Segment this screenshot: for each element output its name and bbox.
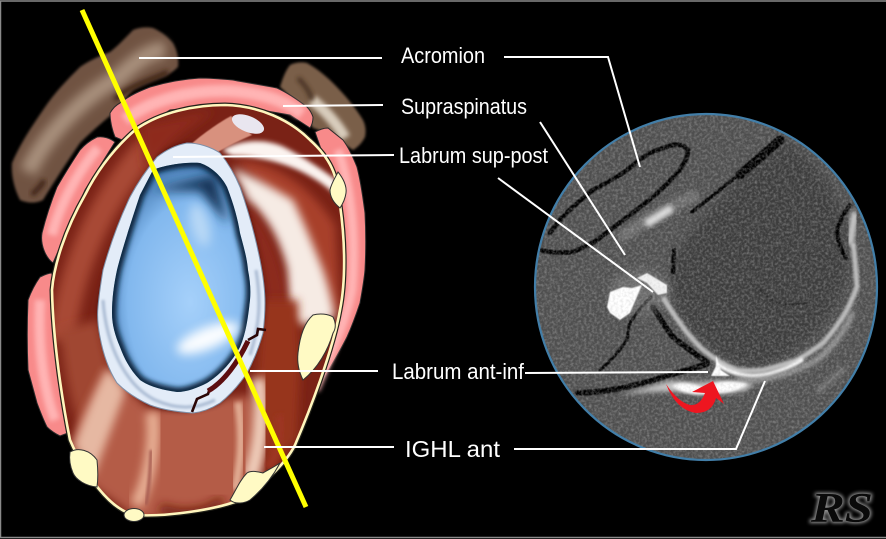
- acromion bone: [12, 27, 366, 203]
- labral tear: [192, 329, 266, 412]
- label: Acromion: Acromion: [401, 43, 485, 68]
- capsule cream rim: [52, 105, 344, 515]
- upper white band: [222, 141, 336, 195]
- bright bursal streak: [646, 208, 672, 224]
- illustration: shoulder glenoid sagittal view: [12, 27, 366, 522]
- labrum shadow: [98, 143, 265, 412]
- black fat planes: [540, 140, 850, 393]
- glenoid labrum ring: [98, 143, 265, 413]
- humeral head: [670, 140, 848, 366]
- biceps tendon white cap: [229, 110, 267, 138]
- label: Labrum sup-post: Labrum sup-post: [399, 143, 548, 168]
- glenoid highlight: [173, 315, 243, 361]
- joint capsule outline: [52, 105, 344, 515]
- humeral cartilage and contrast curve: [663, 243, 857, 371]
- logo: RS signature: RS: [810, 486, 873, 532]
- glenoid cartilage surface (blue): [112, 162, 250, 392]
- biceps tendon: [190, 116, 252, 153]
- CT circle border: [535, 114, 877, 460]
- CT texture: [535, 114, 877, 460]
- CT arthrogram circular image: [535, 114, 877, 460]
- bright contrast: posterior blob: [607, 285, 642, 320]
- glenoid ring shading: [103, 270, 259, 407]
- label: IGHL ant: IGHL ant: [405, 436, 501, 462]
- muscles and tendons inside capsule: [50, 100, 350, 520]
- inferior fan: [72, 370, 262, 520]
- pink muscle highlights: [40, 91, 353, 420]
- leader lines: [139, 57, 765, 449]
- main white band: [232, 168, 335, 325]
- icon: red curved arrow: [666, 381, 724, 413]
- supraspinatus and rotator cuff muscles (pink): [27, 78, 366, 436]
- lower right red: [255, 300, 300, 470]
- label: Labrum ant-inf: Labrum ant-inf: [392, 359, 525, 384]
- posterior contrast halo: [610, 270, 670, 314]
- logo: RS signature: RS: [810, 486, 873, 532]
- label: Supraspinatus: Supraspinatus: [401, 94, 527, 119]
- tear dark band: [208, 341, 248, 391]
- subacromial gray band: [620, 195, 698, 238]
- yellow scan plane line: [82, 10, 306, 507]
- cream fat nodules: [70, 172, 346, 522]
- anterior contrast: [620, 380, 755, 394]
